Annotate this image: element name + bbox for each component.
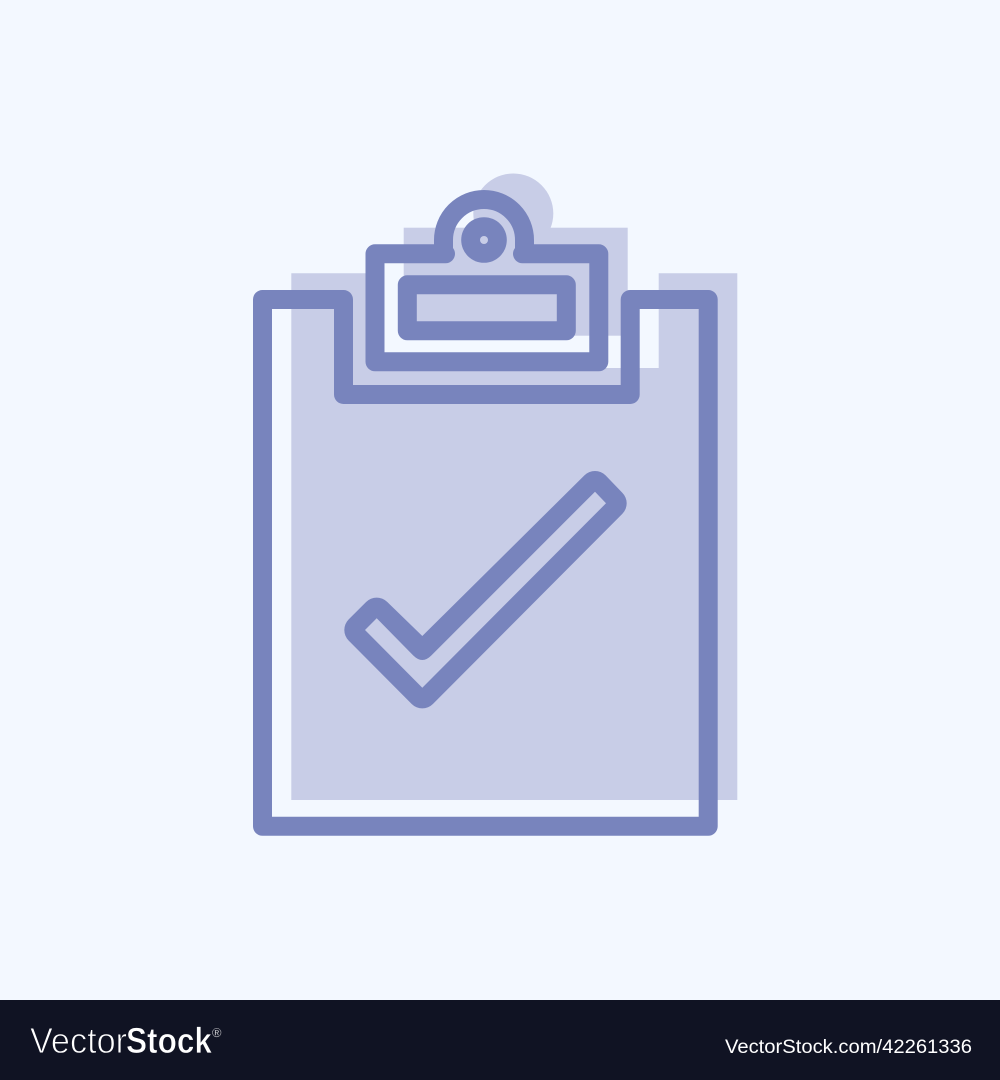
brand logo text (30, 1020, 222, 1061)
brand logo text: ® (212, 1025, 222, 1040)
icon shadow: light offset silhouette (291, 174, 737, 800)
icon: clipboard with check mark (262, 174, 737, 826)
footer bar (0, 1000, 1000, 1080)
brand logo text: Stock (126, 1020, 213, 1061)
clip pivot circle (461, 217, 507, 263)
check mark (344, 471, 627, 708)
clip label rectangle (407, 285, 566, 331)
image id text: VectorStock.com/42261336 (725, 1036, 972, 1058)
clipboard board outline (262, 300, 708, 826)
brand logo text: Vector (30, 1020, 127, 1061)
clip outline (375, 200, 599, 362)
